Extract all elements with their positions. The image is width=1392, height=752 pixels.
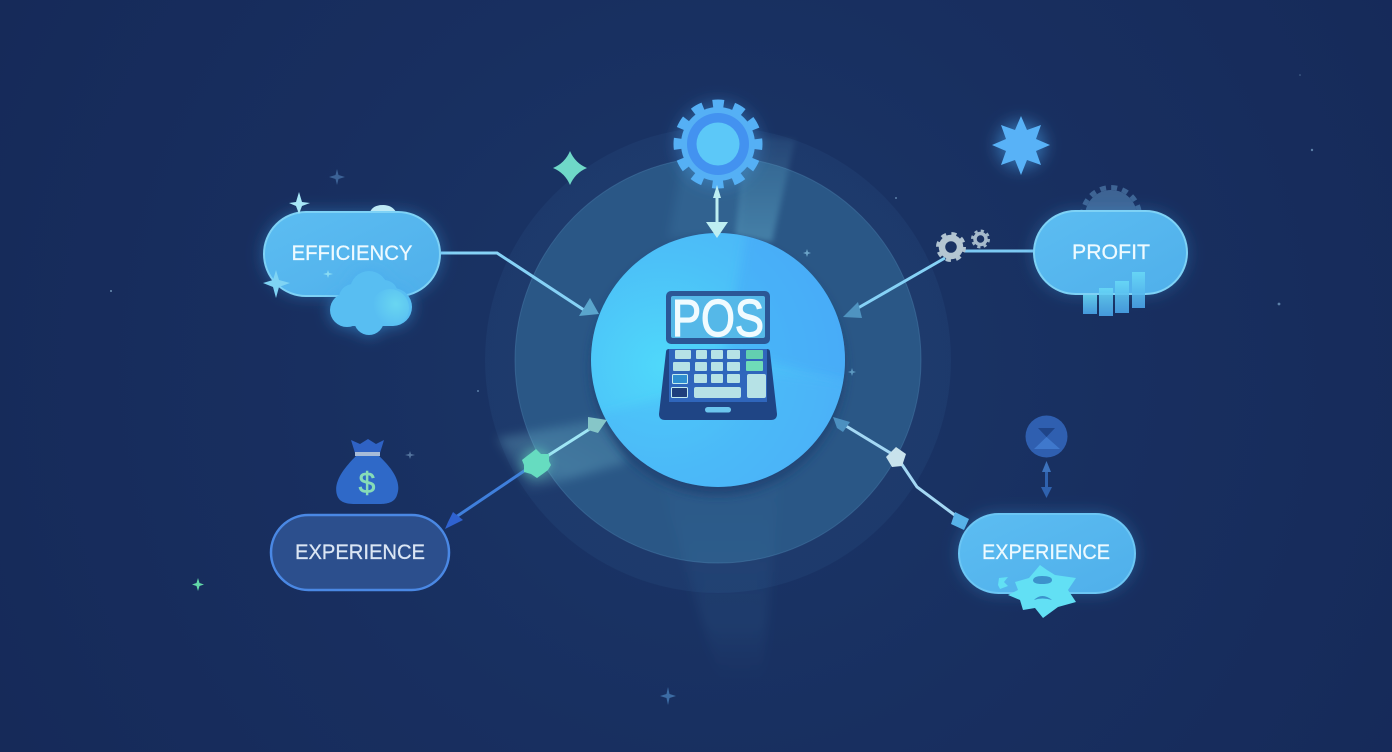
pill: right experience: EXPERIENCE xyxy=(982,541,1110,564)
small gears xyxy=(938,231,988,260)
POS terminal icon xyxy=(659,290,777,420)
hourglass icon with arrow xyxy=(1026,416,1068,498)
decorative star teal xyxy=(553,151,587,185)
icon: bar chart xyxy=(1083,272,1145,316)
connector: profit to POS xyxy=(843,251,1034,318)
background sparkles xyxy=(110,74,1313,705)
connector: right experience to POS xyxy=(833,417,969,530)
light beams xyxy=(497,135,795,680)
decorative star burst top right xyxy=(992,116,1050,175)
pill: left experience: EXPERIENCE xyxy=(295,541,425,564)
pill: efficiency xyxy=(263,192,441,335)
pill: right experience xyxy=(958,513,1136,618)
top gear icon with arrow xyxy=(676,102,760,238)
outer concentric rings xyxy=(485,127,951,593)
connector: left experience to POS xyxy=(445,417,607,529)
pill: efficiency: EFFICIENCY xyxy=(292,242,412,265)
icon: dome behind pill xyxy=(370,205,396,212)
icon: cloud xyxy=(330,271,412,335)
terminal screen: POS xyxy=(672,290,764,348)
connector: efficiency to POS xyxy=(441,253,599,316)
pill: profit: PROFIT xyxy=(1072,241,1150,264)
terminal keypad xyxy=(659,349,777,420)
icon: sparkles xyxy=(263,192,333,298)
double arrow xyxy=(706,185,728,238)
pill: left experience xyxy=(271,515,449,590)
central circle xyxy=(590,233,846,496)
money bag icon xyxy=(336,439,398,504)
icon: gear behind pill xyxy=(1082,188,1140,244)
icon: burst badge xyxy=(998,565,1076,618)
money bag icon: $ xyxy=(359,467,376,500)
infographic canvas xyxy=(110,74,1314,705)
pill: profit xyxy=(1033,188,1188,316)
